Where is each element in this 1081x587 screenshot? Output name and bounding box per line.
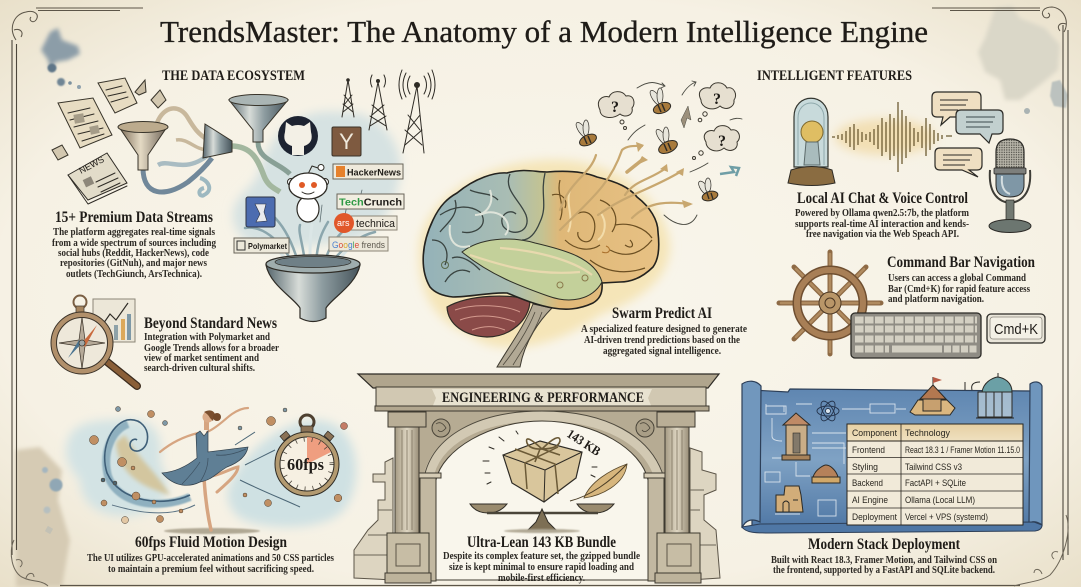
icon: question clouds bbox=[598, 83, 739, 160]
icon: arrow heads bbox=[636, 142, 693, 208]
text block: local AI chat bbox=[795, 190, 969, 240]
text block: fluid motion design: to maintain a premium feel without sacrificing speed. bbox=[108, 564, 314, 575]
illustration: data sources flowing through funnels bbox=[52, 70, 435, 322]
text block: local AI chat: Powered by Ollama qwen2.5:7b, the platform bbox=[795, 208, 969, 219]
icon: large funnel bbox=[266, 255, 360, 322]
icon: Reddit mascot bbox=[288, 164, 328, 222]
table: technology stack: Backend bbox=[852, 478, 883, 489]
icon: stopwatch: 60fps bbox=[287, 455, 324, 474]
text block: command bar navigation: Command Bar Navigation bbox=[887, 254, 1035, 271]
icon: ballerina bbox=[160, 408, 260, 534]
icon: newspaper scrolls bbox=[52, 78, 166, 160]
text block: local AI chat: Local AI Chat & Voice Control bbox=[797, 190, 968, 207]
text block: premium data streams: repositories (GitNuh), and major news bbox=[60, 258, 207, 269]
icon: Y Combinator bbox=[332, 127, 361, 156]
text block: fluid motion design: The UI utilizes GPU-accelerated animations and 50 CSS particles bbox=[87, 553, 334, 564]
icon: glass dome with AI bulb bbox=[788, 98, 835, 186]
illustration: brain with swarm bbox=[419, 81, 742, 367]
text block: premium data streams: social hubs (Reddit, HackerNews), code bbox=[58, 248, 209, 259]
text block: modern stack deployment: Modern Stack Deployment bbox=[808, 536, 961, 553]
text block: beyond standard news: view of market sentiment and bbox=[144, 353, 259, 364]
text block: beyond standard news: Beyond Standard News bbox=[144, 315, 277, 332]
text block: swarm predict: A specialized feature designed to generate bbox=[581, 324, 747, 335]
text block: fluid motion design: 60fps Fluid Motion Design bbox=[135, 534, 287, 551]
icon: feather bbox=[570, 464, 627, 501]
icon: ruined brick walls bbox=[354, 448, 720, 580]
icon: stopwatch bbox=[275, 415, 339, 496]
table: technology stack: React 18.3 1 / Framer Motion 11.15.0 bbox=[905, 445, 1020, 456]
text block: ultra-lean bundle: Despite its complex feature set, the gzipped bundle bbox=[443, 551, 640, 562]
icon: Google Trends label: Google frends bbox=[332, 240, 385, 251]
heading: engineering and performance: ENGINEERING & PERFORMANCE bbox=[442, 390, 644, 406]
text block: swarm predict: Swarm Predict AI bbox=[612, 305, 712, 322]
icon: Ars Technica label: ars bbox=[337, 218, 350, 228]
text block: command bar navigation: and platform navigation. bbox=[888, 294, 984, 305]
icon: question clouds: ? bbox=[611, 99, 619, 116]
table: technology stack: AI Engine bbox=[852, 495, 888, 506]
table: technology stack: FactAPI + SQLite bbox=[905, 478, 966, 489]
icon: bees bbox=[574, 88, 719, 202]
icon: cerebellum and stem bbox=[447, 296, 552, 367]
text block: ultra-lean bundle: Ultra-Lean 143 KB Bundle bbox=[467, 534, 616, 551]
icon: floating particles bbox=[90, 406, 348, 524]
text block: local AI chat: free navigation via the Web Speach API. bbox=[806, 229, 959, 240]
icon: Cmd+K key: Cmd+K bbox=[994, 321, 1038, 338]
icon: folded newspaper: NEWS bbox=[77, 154, 106, 176]
icon: motion ticks bbox=[483, 431, 597, 484]
icon: brain wash halo bbox=[419, 160, 670, 348]
icon: keyboard bbox=[851, 313, 981, 358]
table: technology stack: Technology bbox=[905, 428, 950, 439]
text block: modern stack deployment: Built with React 18.3, Framer Motion, and Tailwind CSS on bbox=[771, 555, 997, 566]
text block: command bar navigation bbox=[887, 254, 1035, 305]
icon: ship wheel bbox=[779, 252, 881, 354]
icon: GitHub bbox=[278, 116, 318, 156]
title: TrendsMaster: The Anatomy of a Modern Intelligence Engine bbox=[160, 14, 928, 49]
icon: water streams into funnel bbox=[245, 190, 375, 262]
text block: premium data streams: The platform aggregates real-time signals bbox=[53, 227, 215, 238]
icon: small funnel with tubes bbox=[118, 108, 212, 196]
icon: top funnel bbox=[229, 94, 290, 174]
table: technology stack: Styling bbox=[852, 462, 878, 473]
icon: compass, magnifier and chart bbox=[51, 296, 137, 386]
icon: HackerNews label: HackerNews bbox=[347, 168, 401, 178]
icon: sideways funnel and pipe bbox=[203, 124, 280, 192]
icon: small flight arrows bbox=[628, 81, 742, 224]
text block: ultra-lean bundle: size is kept minimal to ensure rapid loading and bbox=[449, 562, 634, 573]
text block: swarm predict bbox=[581, 305, 747, 357]
icon: inner piers bbox=[417, 473, 668, 581]
icon: columns bbox=[385, 412, 701, 583]
icon: radio towers bbox=[342, 70, 435, 153]
text block: modern stack deployment: the frontend, supported by a FastAPI and SQLite backend. bbox=[773, 565, 995, 576]
icon: question clouds: ? bbox=[718, 133, 726, 150]
text block: local AI chat: supports real-time AI interaction and kends- bbox=[795, 219, 969, 230]
text block: beyond standard news: Google Trends allows for a broader bbox=[144, 343, 279, 354]
illustration: dancer and stopwatch bbox=[66, 406, 356, 534]
icon: atom bbox=[817, 399, 839, 423]
icon: entablature bbox=[358, 374, 719, 411]
icon: blueprint connectors bbox=[765, 404, 906, 516]
panel: stone archway bbox=[354, 374, 720, 583]
icon: parcel on scale bbox=[470, 438, 614, 533]
icon: blue square bbox=[246, 197, 275, 227]
text block: premium data streams: outlets (TechGiunch, ArsTechnica). bbox=[66, 269, 202, 280]
text block: ultra-lean bundle bbox=[443, 534, 640, 584]
icon: HackerNews label bbox=[333, 164, 403, 179]
icon: Ars Technica label: technica bbox=[356, 218, 396, 230]
icon: Cmd+K key bbox=[987, 314, 1045, 343]
icon: brain body bbox=[423, 170, 659, 309]
text block: swarm predict: AI-driven trend predictions based on the bbox=[584, 335, 740, 346]
chart: voice waveform bbox=[832, 102, 952, 172]
text block: beyond standard news bbox=[144, 315, 279, 374]
icon: neural streams with arrows bbox=[560, 146, 690, 230]
text block: beyond standard news: search-driven cultural shifts. bbox=[144, 363, 255, 374]
icon: Ars Technica label bbox=[334, 213, 397, 233]
table: technology stack: Deployment bbox=[852, 512, 897, 523]
text block: premium data streams bbox=[52, 209, 217, 280]
icon: sandstone building bbox=[776, 486, 803, 512]
table: technology stack: Ollama (Local LLM) bbox=[905, 495, 975, 506]
table: technology stack: Tailwind CSS v3 bbox=[905, 462, 962, 473]
icon: columned temple bbox=[782, 413, 810, 460]
text block: modern stack deployment bbox=[771, 536, 997, 576]
panel: blueprint scroll bbox=[742, 373, 1042, 533]
text: 143 KB label: 143 KB bbox=[564, 426, 604, 459]
text block: ultra-lean bundle: mobile-first efficiency. bbox=[498, 573, 585, 584]
table: technology stack: Frontend bbox=[852, 445, 885, 456]
icon: arch spandrels and opening bbox=[418, 410, 668, 580]
table: technology stack: Component bbox=[852, 428, 897, 439]
icon: studio microphone bbox=[989, 139, 1031, 232]
icon: question clouds: ? bbox=[713, 91, 721, 108]
icon: speech bubbles bbox=[932, 92, 1003, 177]
icon: Y Combinator: Y bbox=[339, 129, 354, 154]
table: technology stack: Vercel + VPS (systemd) bbox=[905, 512, 988, 523]
text block: swarm predict: aggregated signal intelligence. bbox=[603, 346, 721, 357]
table: technology stack bbox=[847, 424, 1023, 525]
text block: command bar navigation: Users can access a global Command bbox=[888, 273, 1026, 284]
text block: beyond standard news: Integration with Polymarket and bbox=[144, 332, 270, 343]
text block: premium data streams: 15+ Premium Data Streams bbox=[55, 209, 213, 226]
icon: blue wash cloud bbox=[233, 112, 401, 250]
icon: folded newspaper bbox=[68, 153, 127, 204]
icon: Polymarket label bbox=[234, 238, 289, 253]
icon: tented house bbox=[910, 377, 955, 415]
section heading: intelligent features: INTELLIGENT FEATURES bbox=[757, 68, 912, 84]
icon: Polymarket label: Polymarket bbox=[248, 241, 287, 251]
icon: domed building bbox=[812, 465, 840, 483]
section heading: the data ecosystem: THE DATA ECOSYSTEM bbox=[162, 68, 305, 84]
text block: command bar navigation: Bar (Cmd+K) for rapid feature access bbox=[888, 284, 1030, 295]
icon: blueprint sheet bbox=[742, 381, 1042, 533]
icon: TechCrunch label: TechCrunch bbox=[339, 196, 402, 208]
text block: premium data streams: from a wide spectrum of sources including bbox=[52, 238, 217, 249]
icon: watercolor swirl bbox=[66, 419, 356, 527]
text block: fluid motion design bbox=[87, 534, 334, 575]
icon: glass dome building bbox=[965, 373, 1014, 418]
